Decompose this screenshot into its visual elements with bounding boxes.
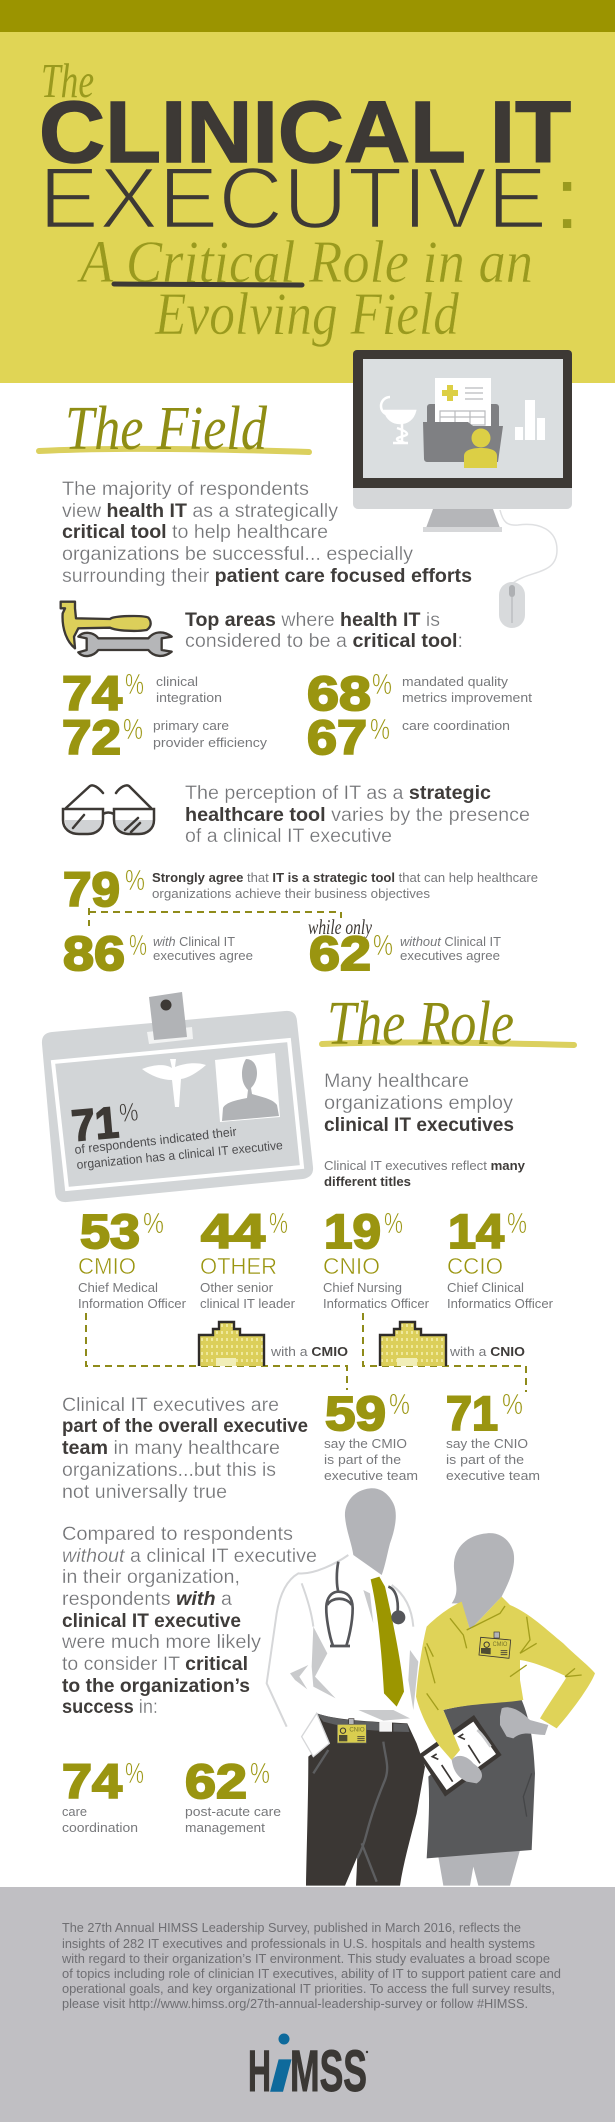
icon: ID badge with 71%: organization has a clinical IT executive: [76, 1138, 283, 1172]
stat: 86% with clinical IT executives: [63, 928, 253, 981]
stat: 86% with clinical IT executives: with Clinical IT: [153, 934, 235, 949]
stat: 62% without clinical IT executives: while only: [308, 915, 372, 939]
stat: 68% mandated quality: 68: [307, 668, 371, 721]
stat: 53% CMIO: %: [143, 1208, 164, 1240]
stat: 71% say the CNIO: %: [502, 1389, 523, 1421]
stat: 71% say the CNIO: 71: [446, 1388, 498, 1441]
stat: 19% CNIO: CNIO: [323, 1253, 380, 1279]
text block: role intro: different titles: [324, 1174, 411, 1189]
dashed connector: CMIO: [86, 1313, 347, 1390]
footer text: of topics including role of clinician IT executives, ability of IT to support patient care and: [62, 1966, 561, 1981]
header panel: [0, 0, 615, 383]
icon: hospital with a CMIO: with a CMIO: [270, 1344, 348, 1359]
stat: 53% CMIO: Information Officer: [78, 1296, 187, 1311]
text block: role intro: [324, 1071, 526, 1189]
logo: HIMSS: ı: [270, 2039, 292, 2104]
text block: executive team: Clinical IT executives are: [62, 1395, 279, 1416]
stat: 59% say the CMIO: 59: [325, 1388, 386, 1441]
footer text: please visit http://www.himss.org/27th-annual-leadership-survey or follow #HIMSS.: [62, 1996, 528, 2011]
icon: ID badge with 71%: of respondents indicated their: [74, 1125, 237, 1157]
stat: 74% clinical integration: %: [125, 669, 144, 701]
text: perception of IT: healthcare tool varies by the presence: [185, 805, 530, 826]
stat: 53% CMIO: 53: [80, 1206, 140, 1259]
stat: 86% with clinical IT executives: executives agree: [153, 948, 253, 963]
text block: field intro: [62, 479, 472, 587]
stat: 53% CMIO: CMIO: [78, 1253, 136, 1279]
stat: 14% CCIO: %: [507, 1208, 527, 1240]
text: top areas heading: considered to be a critical tool:: [185, 631, 463, 652]
stat: 62% post-acute care: post-acute care: [185, 1804, 281, 1819]
footer text: insights of 282 IT executives and professionals in U.S. hospitals and health systems: [62, 1936, 535, 1951]
text block: role intro: Many healthcare: [324, 1071, 469, 1092]
stat: 59% say the CMIO: is part of the: [324, 1452, 401, 1467]
icon: mouse with cord: [499, 510, 557, 628]
text block: field intro: The majority of respondents: [62, 479, 309, 500]
text block: compared to respondents: were much more likely: [61, 1632, 262, 1653]
stat: 74% clinical integration: 74: [62, 668, 122, 721]
stat: 44% Other: 44: [201, 1206, 265, 1259]
stat: 72% primary care: [62, 712, 268, 765]
title: CLINICAL IT: [39, 84, 571, 181]
footer panel: [0, 1887, 615, 2122]
stat: 86% with clinical IT executives: %: [129, 930, 147, 962]
text: perception of IT: [185, 783, 530, 847]
text block: field intro: surrounding their patient care focused efforts: [62, 566, 472, 587]
logo: HIMSS: MSS: [290, 2039, 367, 2104]
stat: 67% care coordination: [307, 712, 510, 765]
stat: 19% CNIO: Informatics Officer: [323, 1296, 430, 1311]
stat: 62% post-acute care: 62: [185, 1756, 247, 1809]
stat: 53% CMIO: Chief Medical: [78, 1280, 158, 1295]
text block: role intro: organizations employ: [324, 1093, 514, 1114]
stat: 62% without clinical IT executives: without Clinical IT: [400, 934, 501, 949]
stat: 72% primary care: provider efficiency: [153, 735, 268, 750]
title: [39, 53, 579, 347]
icon: hospital with a CNIO: [380, 1322, 525, 1366]
stat: 62% post-acute care: %: [250, 1758, 270, 1790]
stat: 44% Other: OTHER: [200, 1253, 277, 1279]
stat: 14% CCIO: [447, 1206, 554, 1311]
text block: compared to respondents: without a clinical IT executive: [62, 1546, 317, 1567]
icon: hospital with a CMIO: [199, 1322, 348, 1366]
text block: compared to respondents: in their organization,: [62, 1567, 240, 1588]
stat: 74% care coordination: coordination: [62, 1820, 138, 1835]
stat: 74% clinical integration: integration: [156, 690, 222, 705]
stat: 67% care coordination: 67: [307, 712, 367, 765]
stat: 14% CCIO: CCIO: [447, 1253, 503, 1279]
stat: 62% post-acute care: management: [185, 1820, 265, 1835]
text block: role intro: clinical IT executives: [324, 1115, 514, 1136]
icon: computer monitor: [353, 350, 572, 532]
stat: 68% mandated quality: %: [372, 669, 392, 701]
icon: glasses: [63, 785, 154, 834]
stat: 67% care coordination: %: [370, 714, 390, 746]
text block: field intro: view health IT as a strategically: [62, 501, 339, 522]
stat: 62% post-acute care: [185, 1756, 281, 1835]
figure: female executive: CMIO: [493, 1642, 508, 1648]
stat: 62% without clinical IT executives: %: [373, 930, 393, 962]
stat: 86% with clinical IT executives: 86: [63, 928, 125, 981]
footer text: The 27th Annual HIMSS Leadership Survey, published in March 2016, reflects the: [62, 1920, 521, 1935]
footer text: operational goals, and key organizational IT priorities. To access the full survey results,: [62, 1981, 555, 1996]
icon: ID badge with 71%: 71: [70, 1098, 121, 1151]
stat: 72% primary care: 72: [62, 712, 121, 765]
title: The: [41, 53, 94, 108]
stat: 62% without clinical IT executives: 62: [309, 928, 371, 981]
stat: 62% without clinical IT executives: executives agree: [400, 948, 500, 963]
stat: 79% strongly agree: Strongly agree that IT is a strategic tool that can help healthcare: [152, 870, 538, 885]
stat: 14% CCIO: Informatics Officer: [447, 1296, 554, 1311]
stat: 74% care coordination: care: [62, 1804, 87, 1819]
stat: 71% say the CNIO: is part of the: [446, 1452, 524, 1467]
icon: hospital with a CNIO: with a CNIO: [449, 1344, 525, 1359]
footer text: with regard to their organization’s IT environment. This study evaluates a broad scope: [61, 1951, 550, 1966]
stat: 74% care coordination: [62, 1756, 144, 1835]
stat: 79% strongly agree: organizations achieve their business objectives: [152, 886, 431, 901]
text block: executive team: [62, 1395, 308, 1503]
text block: compared to respondents: to consider IT critical: [62, 1654, 248, 1675]
text: top areas heading: Top areas where health IT is: [185, 610, 440, 631]
logo: HIMSS: [248, 2034, 368, 2104]
stat: 72% primary care: %: [123, 714, 143, 746]
stat: 53% CMIO: [78, 1206, 187, 1311]
illustration: doctor and executive figures: [267, 1488, 595, 1886]
text block: executive team: team in many healthcare: [62, 1438, 280, 1459]
text block: executive team: organizations...but this is: [62, 1460, 276, 1481]
stat: 71% say the CNIO: executive team: [446, 1468, 540, 1483]
text block: compared to respondents: Compared to respondents: [62, 1524, 293, 1545]
stat: 44% Other: %: [269, 1208, 288, 1240]
text block: field intro: critical tool to help healthcare: [62, 522, 328, 543]
stat: 19% CNIO: %: [384, 1208, 403, 1240]
stat: 71% say the CNIO: say the CNIO: [446, 1436, 528, 1451]
text block: compared to respondents: success in:: [62, 1697, 158, 1718]
title: :: [555, 150, 579, 247]
dashed connector: 79% to split: [89, 908, 341, 926]
heading: The Role: The Role: [327, 990, 514, 1058]
icon: ID badge with 71%: %: [118, 1096, 139, 1128]
title: A Critical Role in an: [76, 229, 533, 295]
stat: 68% mandated quality: metrics improvement: [402, 690, 532, 705]
footer text: [61, 1920, 561, 2011]
icon: ID badge with 71%: [42, 992, 313, 1202]
figure: male doctor: CNIO: [349, 1728, 365, 1734]
text block: compared to respondents: [61, 1524, 317, 1718]
text block: compared to respondents: to the organization’s: [62, 1676, 250, 1697]
icon: hammer and wrench: [61, 602, 172, 656]
stat: 44% Other: clinical IT leader: [200, 1296, 296, 1311]
stat: 79% strongly agree: [63, 864, 538, 917]
stat: 74% care coordination: %: [125, 1758, 144, 1790]
stat: 44% Other: Other senior: [200, 1280, 274, 1295]
logo: HIMSS: H: [248, 2039, 271, 2104]
text: top areas heading: [185, 610, 463, 652]
stat: 74% clinical integration: clinical: [156, 674, 198, 689]
stat: 79% strongly agree: 79: [63, 864, 120, 917]
figure: female executive: [416, 1533, 595, 1886]
stat: 59% say the CMIO: executive team: [324, 1468, 418, 1483]
text: perception of IT: The perception of IT as a strategic: [185, 783, 491, 804]
text block: compared to respondents: respondents with a: [62, 1589, 232, 1610]
text block: compared to respondents: clinical IT executive: [62, 1611, 241, 1632]
stat: 68% mandated quality: [307, 668, 532, 721]
stat: 14% CCIO: Chief Clinical: [447, 1280, 524, 1295]
heading: The Field: The Field: [65, 395, 268, 463]
stat: 59% say the CMIO: %: [389, 1389, 410, 1421]
stat: 19% CNIO: Chief Nursing: [323, 1280, 402, 1295]
text block: executive team: not universally true: [62, 1482, 227, 1503]
text block: executive team: part of the overall executive: [62, 1416, 308, 1437]
text block: role intro: Clinical IT executives reflect many: [324, 1158, 526, 1173]
stat: 71% say the CNIO: [446, 1388, 540, 1483]
stat: 19% CNIO: [323, 1206, 430, 1311]
stat: 62% without clinical IT executives: [308, 915, 501, 981]
stat: 59% say the CMIO: say the CMIO: [324, 1436, 407, 1451]
title: EXECUTIVE: [39, 150, 547, 247]
stat: 14% CCIO: 14: [448, 1206, 504, 1259]
stat: 68% mandated quality: mandated quality: [402, 674, 509, 689]
stat: 74% care coordination: 74: [62, 1756, 122, 1809]
stat: 79% strongly agree: %: [125, 865, 145, 897]
stat: 59% say the CMIO: [324, 1388, 418, 1483]
text: perception of IT: of a clinical IT executive: [185, 826, 392, 847]
stat: 72% primary care: primary care: [153, 718, 229, 733]
figure: male doctor: [267, 1488, 425, 1886]
text block: field intro: organizations be successful... especially: [62, 544, 414, 565]
dashed connector: CNIO: [363, 1313, 526, 1392]
title: Evolving Field: [154, 281, 460, 347]
stat: 74% clinical integration: [62, 668, 222, 721]
stat: 19% CNIO: 19: [324, 1206, 381, 1259]
stat: 67% care coordination: care coordination: [402, 718, 510, 733]
stat: 44% Other: [200, 1206, 296, 1311]
